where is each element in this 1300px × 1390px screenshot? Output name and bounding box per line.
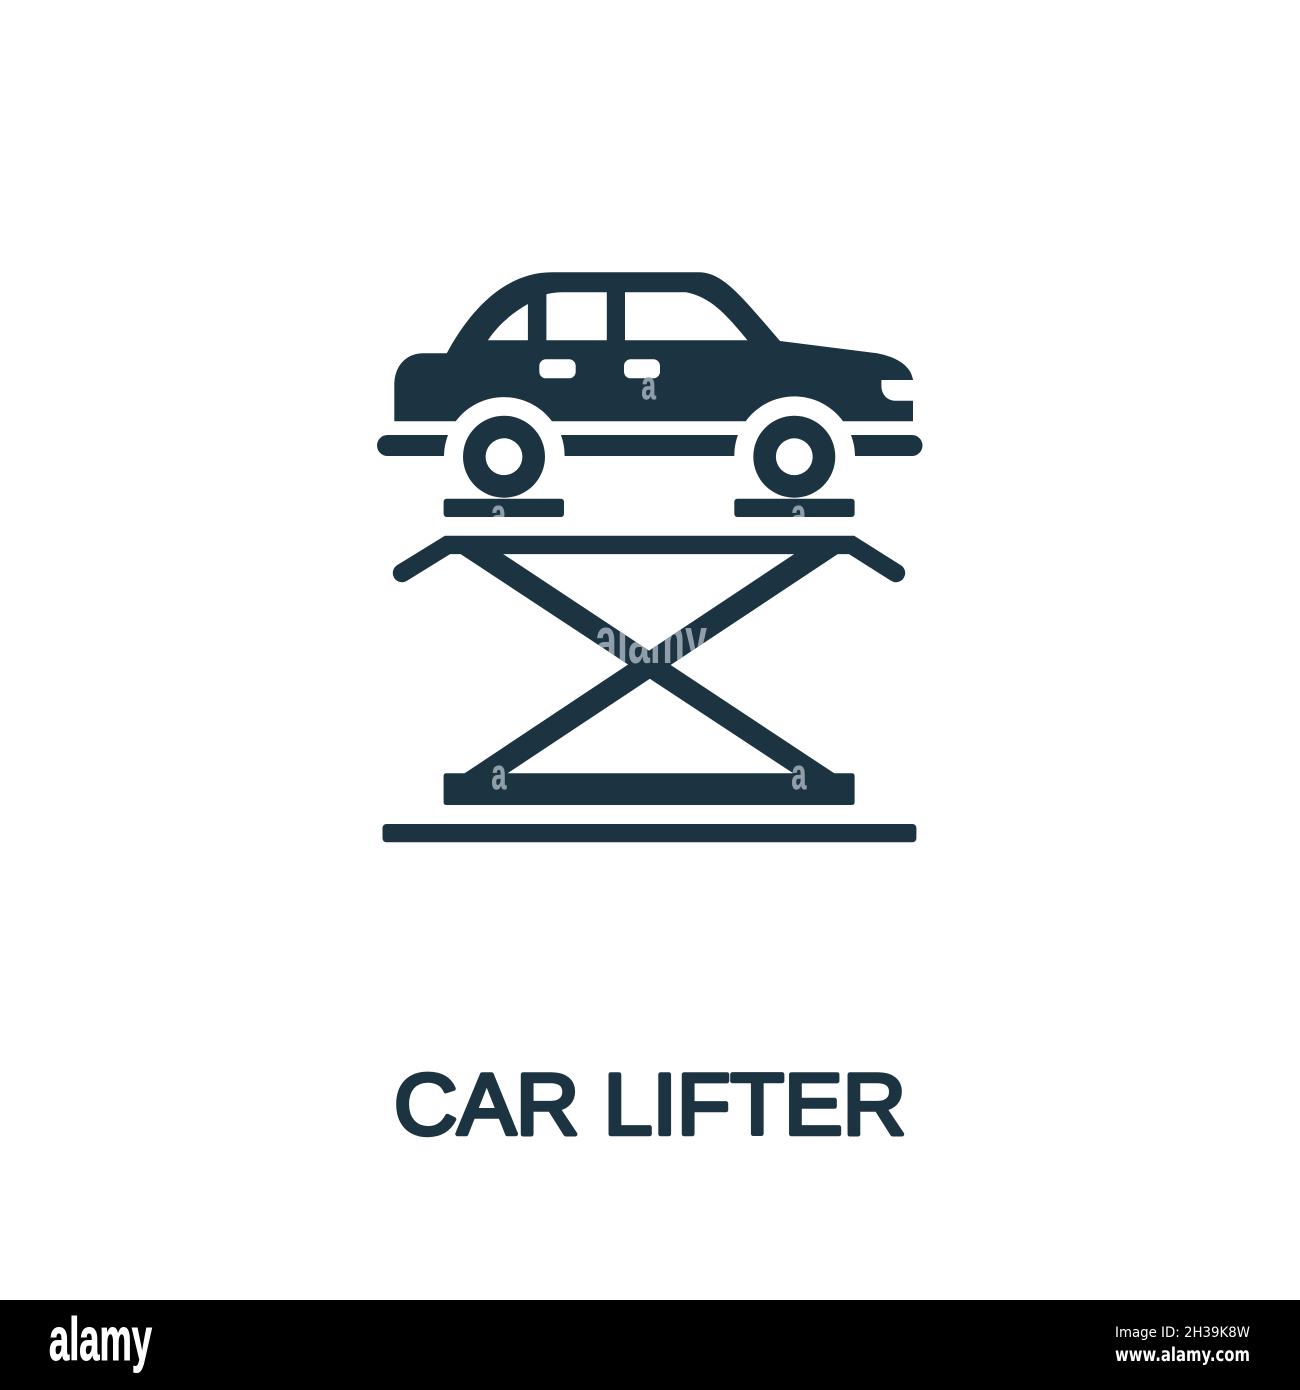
icon: car on scissor lift (377, 272, 923, 842)
scissor arm descending right (457, 552, 837, 775)
car body with windows and door handles (394, 272, 913, 421)
scissor arm descending left (462, 552, 841, 775)
lift rail right segment (851, 435, 923, 456)
logo: alamy: alamy (49, 1306, 152, 1373)
watermark: base right a: a (791, 750, 807, 799)
ground line (382, 824, 916, 842)
image id: Image ID: 2H39K8W (1115, 1324, 1250, 1341)
footer bar (0, 1300, 1300, 1390)
watermark: left pad a: a (491, 490, 506, 539)
right wheel pad (734, 499, 855, 517)
watermark: door a: a (641, 364, 656, 408)
watermark: right pad a: a (791, 490, 806, 539)
lift base block (444, 773, 855, 805)
title: CAR LIFTER (394, 1057, 906, 1153)
rear wheel (463, 416, 545, 498)
website: www.alamy.com (1115, 1345, 1250, 1366)
watermark: center alamy: alamy (595, 603, 707, 677)
footer background (0, 1300, 1300, 1390)
lift rail middle segment (561, 435, 738, 456)
front wheel (753, 416, 835, 498)
lift top bracket (402, 545, 896, 573)
left wheel pad (444, 499, 564, 517)
lift rail left segment (377, 435, 448, 456)
watermark: base left a: a (491, 750, 507, 799)
